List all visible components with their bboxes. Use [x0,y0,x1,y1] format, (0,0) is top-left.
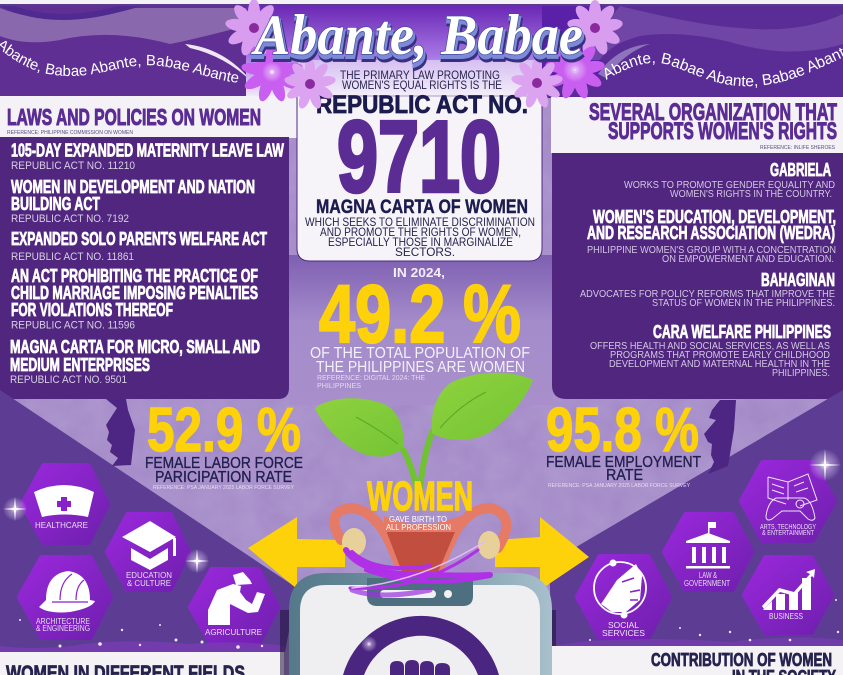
stat: 95.8 percent: 95.8 % [546,396,699,465]
notch speaker [380,590,452,598]
heading: laws and policies: LAWS AND POLICIES ON WOMEN [7,104,261,130]
intro text [340,68,502,92]
population caption: THE PHILIPPINES ARE WOMEN [316,359,525,376]
law 3: EXPANDED SOLO PARENTS WELFARE ACT [11,229,267,249]
top white strip [0,0,843,6]
middle column backdrop [289,255,553,405]
diagonal panel right [549,390,843,646]
stat: 52.9 percent: 52.9 % [147,396,301,465]
population caption [310,345,530,376]
org: cara: PROGRAMS THAT PROMOTE EARLY CHILDHOOD [610,350,830,361]
uterus illustration [334,508,506,595]
law 2: BUILDING ACT [11,194,100,214]
ovaries [342,528,366,556]
org: cara: DEVELOPMENT AND MATERNAL HEALTHN IN THE [609,359,830,370]
hexagon: healthcare [23,466,107,542]
law 1 [11,140,284,172]
reference: REFERENCE: INLIFE SHEROES [760,145,836,151]
org: bahaginan [580,270,835,309]
hexagon: law and government: GOVERNMENT [684,579,730,588]
curved ribbon text left: Abante, Babae Abante, Babae Abante [0,40,238,82]
icon: profile silhouette right [704,400,736,474]
intro text: WOMEN'S EQUAL RIGHTS IS THE [342,78,502,92]
icon: government building [686,522,730,568]
heading: women: WOMEN [367,473,473,519]
icon: helping hands [594,560,646,618]
flower: lower left [284,58,336,110]
tubes [334,508,400,565]
title: abante babae: Abante, Babae [253,10,585,73]
law 3: REPUBLIC ACT NO. 11861 [11,251,134,263]
caption: employment: RATE [606,467,643,484]
republic act heading: REPUBLIC ACT NO. [316,91,528,119]
icon: farmer silhouette [208,572,265,625]
arrow: right [495,517,589,590]
flower: top left [224,0,284,57]
description: WHICH SEEKS TO ELIMINATE DISCRIMINATION [305,215,535,229]
population caption: OF THE TOTAL POPULATION OF [310,345,530,362]
icon: hard hat [39,571,95,612]
caption: labor force [145,455,303,486]
stems [402,448,417,490]
diagonal panel left [0,390,297,652]
arrow: left [248,517,345,589]
flower: top right [566,0,624,56]
hexagon: arts technology entertainment: ARTS, TECHNOLOGY [760,524,816,531]
title backdrop [246,6,542,98]
hexagon: law and government: LAW & [699,571,717,580]
glitter [0,599,843,652]
hexagon: architecture: ARCHITECTURE [36,617,90,626]
law 1: REPUBLIC ACT NO. 11210 [11,160,135,172]
law 5 [10,337,260,386]
header band left [0,6,300,98]
leaf right [432,373,533,440]
caption: employment [546,454,701,484]
population reference [317,375,425,390]
panel: republic act [297,60,542,261]
panel: organizations list [552,153,843,399]
law 2: WOMEN IN DEVELOPMENT AND NATION [11,177,255,197]
law 4 [11,266,258,332]
law 4: FOR VIOLATIONS THEREOF [11,300,173,320]
purple swirl [346,542,490,595]
hexagon: social services: SOCIAL [608,620,639,630]
reference: employment: REFERENCE: PSA JANUARY 2025 LABOR FORCE SURVEY [548,483,690,489]
population reference: REFERENCE: DIGITAL 2024: THE [317,375,425,382]
leaf left [315,398,403,457]
stat: 49.2 percent: 49.2 % [319,269,521,360]
description: AND PROMOTE THE RIGHTS OF WOMEN, [320,225,521,239]
reference: REFERENCE: PHILIPPINE COMMISSION ON WOMEN [7,130,133,136]
hexagon: business: BUSINESS [769,612,803,621]
uterus body [384,525,458,572]
description [305,215,535,259]
hexagon: architecture [20,558,110,637]
org: cara [590,322,831,379]
hexagon: law and government [665,515,751,589]
panel: contribution of women [552,646,843,675]
description: ESPECIALLY THOSE IN MARGINALIZE [328,235,513,249]
law 4: CHILD MARRIAGE IMPOSING PENALTIES [11,283,258,303]
hexagon: education: & CULTURE [127,579,171,588]
org: gabriela [624,160,835,200]
caption: employment: FEMALE EMPLOYMENT [546,454,701,471]
law 4: REPUBLIC ACT NO. 11596 [11,320,135,332]
flower: magenta right [544,40,606,100]
org: cara: PHILIPPINES. [772,368,830,379]
caption: gave birth [386,514,451,532]
leaf veins [356,392,486,444]
org: wedra: ON EMPOWERMENT AND EDUCATION. [662,254,834,265]
law 2: REPUBLIC ACT NO. 7192 [11,213,129,225]
law 5: MAGNA CARTA FOR MICRO, SMALL AND [10,337,260,357]
hexagon: education [108,515,188,589]
law 5: REPUBLIC ACT NO. 9501 [10,374,127,386]
panel: laws heading [0,96,297,138]
hexagon: arts technology entertainment [742,463,834,540]
reference: labor force: REFERENCE: PSA JANUARY 2025 LABOR FORCE SURVEY [153,485,294,491]
icon: graduation cap [122,521,176,570]
icon: book and controller [766,474,817,520]
panel: women in different fields [0,652,284,675]
hexagon: education: EDUCATION [126,571,172,580]
year label: IN 2024, [393,265,445,280]
hexagon: agriculture: AGRICULTURE [205,628,262,637]
plant [315,373,533,490]
population reference: PHILIPPINES [317,383,361,390]
hexagon: social services [578,557,669,638]
org: wedra [587,207,836,265]
hexagon: business [745,558,831,632]
org: gabriela: WOMEN'S RIGHTS IN THE COUNTRY. [670,189,832,200]
law 3 [11,229,267,263]
flower: lower right [511,57,563,109]
purple ring [343,616,499,675]
phone screen [300,585,540,675]
icon: nurse cap [34,485,94,517]
icon: raised fist [390,660,450,675]
number 9710: 9710 [337,102,501,214]
panel: laws list [0,137,289,399]
caption: gave birth: ALL PROFESSION [386,522,451,532]
sparkles [3,449,841,652]
heading: several organization [589,99,837,145]
phone [289,573,552,675]
intro text: THE PRIMARY LAW PROMOTING [340,68,500,82]
law 5: MEDIUM ENTERPRISES [10,355,150,375]
caption: labor force: FEMALE LABOR FORCE [145,455,303,472]
phone frame [289,573,552,675]
title: abante babae: Abante, Babae [251,4,583,67]
magna carta heading: MAGNA CARTA OF WOMEN [316,197,528,218]
hexagon: agriculture [191,570,277,644]
caption: labor force: PARICIPATION RATE [155,469,292,486]
phone shadow [280,610,556,675]
hexagon: architecture: & ENGINEERING [36,624,90,633]
description: SECTORS. [395,245,455,259]
law 4: AN ACT PROHIBITING THE PRACTICE OF [11,266,258,286]
icon: profile silhouette left [106,399,135,466]
law 1: 105-DAY EXPANDED MATERNITY LEAVE LAW [11,140,284,160]
flower: magenta left [240,41,304,103]
law 2 [11,177,255,225]
hexagon: arts technology entertainment: & ENTERTAINMENT [762,530,815,537]
header band right [540,6,843,98]
hexagon: healthcare: HEALTHCARE [35,521,88,530]
phone notch [367,578,473,606]
caption: gave birth: GAVE BIRTH TO [389,514,447,524]
panel: organizations heading [551,97,843,153]
title: abante babae: Abante, Babae [252,8,584,70]
hexagon: social services: SERVICES [602,628,645,638]
icon: growth chart [762,569,815,610]
